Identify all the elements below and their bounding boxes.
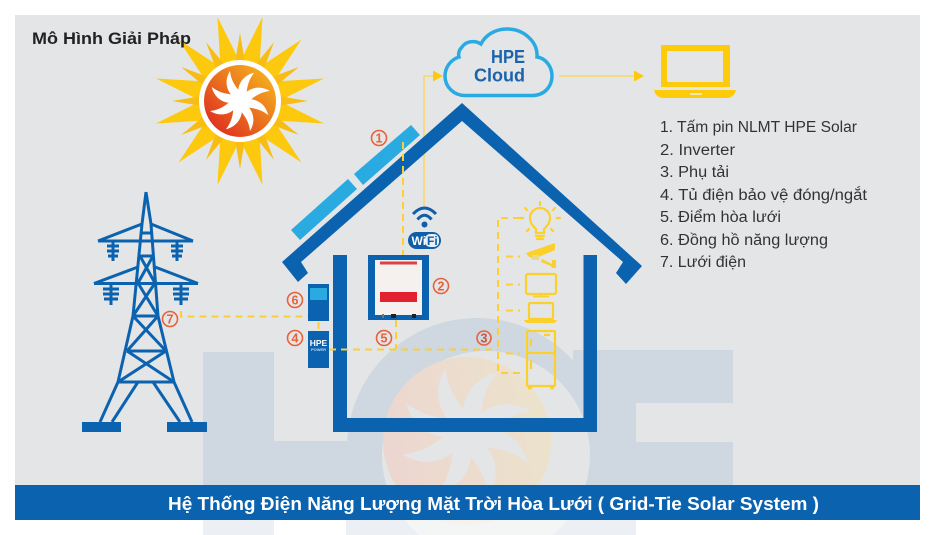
icon: cloud	[445, 29, 552, 96]
protection cabinet	[308, 331, 329, 368]
banner title: Hệ Thống Điện Năng Lượng Mặt Trời Hòa Lưới ( Grid-Tie Solar System )	[168, 494, 819, 514]
icon: fridge	[527, 331, 555, 388]
icon: monitor	[526, 274, 556, 296]
legend list: 2. Inverter	[660, 142, 735, 159]
icon: sun	[153, 14, 327, 188]
legend list: 6. Đồng hồ năng lượng	[660, 232, 828, 249]
house: walls	[333, 255, 597, 432]
number markers: 5	[381, 332, 388, 346]
house: roof	[282, 103, 642, 284]
arrow: wifi to cloud	[424, 70, 443, 206]
wiring: dashed yellow lines	[181, 142, 520, 373]
solar panels	[291, 125, 420, 240]
banner	[15, 485, 920, 520]
icon: cloud: Cloud	[474, 64, 525, 86]
icon: wifi	[408, 208, 441, 249]
icon: cloud: HPE	[491, 46, 525, 67]
inverter	[368, 255, 429, 320]
icon: security camera	[526, 243, 556, 268]
legend list: 5. Điểm hòa lưới	[660, 209, 781, 226]
watermark fade below banner	[0, 520, 935, 535]
icon: transmission tower	[82, 192, 207, 432]
icon: wifi: Wi	[412, 234, 426, 248]
legend list: 1. Tấm pin NLMT HPE Solar	[660, 119, 857, 136]
protection cabinet: POWER	[311, 347, 326, 352]
icon: wifi: Fi	[427, 234, 438, 248]
arrow: cloud to laptop	[559, 70, 644, 82]
number markers: 7	[167, 312, 174, 326]
number markers: 2	[438, 280, 445, 294]
energy meter	[308, 284, 329, 321]
legend list	[660, 119, 868, 271]
number markers: 6	[292, 294, 299, 308]
legend list: 4. Tủ điện bảo vệ đóng/ngắt	[660, 187, 868, 204]
number markers	[162, 130, 491, 346]
number markers: 1	[376, 132, 383, 146]
protection cabinet: HPE	[310, 338, 328, 348]
heading: Mô Hình Giải Pháp	[32, 29, 191, 48]
icon: bulb	[520, 202, 560, 239]
watermark: HPE logo	[203, 318, 733, 535]
legend list: 3. Phụ tải	[660, 164, 729, 181]
legend list: 7. Lưới điện	[660, 254, 746, 271]
icon: small laptop	[524, 303, 557, 323]
icon: monitoring laptop	[654, 45, 736, 98]
number markers: 4	[292, 332, 299, 346]
number markers: 3	[481, 332, 488, 346]
